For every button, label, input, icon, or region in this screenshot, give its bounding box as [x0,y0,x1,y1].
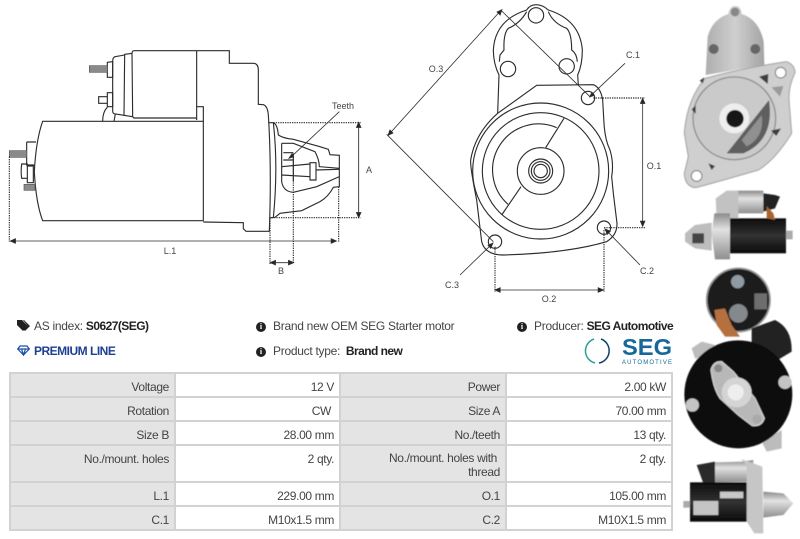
label: C.1: C.1 [626,50,640,60]
mounting holes [581,91,595,105]
specification table: Size B [136,428,169,442]
info: product type: i [260,347,262,356]
photo: rear view [684,268,792,452]
photo: opposite side view [683,459,793,533]
motor body [34,121,203,221]
concentric circles and hub [473,103,609,239]
dimension lines [9,123,361,264]
specification table [9,372,673,531]
info: producer: Producer: SEG Automotive [534,319,673,333]
info: OEM description: i [260,322,262,331]
specification table: 229.00 mm [277,489,334,503]
specification table: No./mount. holes with [389,451,497,465]
drive housing [197,51,270,231]
specification table: Rotation [127,404,169,418]
front view technical drawing [386,4,661,304]
label: O.2: O.2 [542,294,556,304]
specification table: No./mount. holes [84,452,169,466]
info: AS index: AS index: S0627(SEG) [34,319,148,333]
specification table: M10X1.5 mm [598,513,666,527]
specification table: 28.00 mm [283,428,334,442]
specification table: 2.00 kW [624,380,666,394]
photo: front view [684,6,795,188]
info: producer: i [521,322,523,331]
info: product type: Product type: Brand new [273,344,402,358]
specification table: 70.00 mm [615,404,666,418]
side view technical drawing [8,50,372,276]
label: C.3: C.3 [445,280,459,290]
specification table: 12 V [311,380,334,394]
dimension lines [495,98,645,292]
specification table: C.2 [482,513,500,527]
SEG Automotive logo: SEG [622,334,672,360]
photo: side view [685,191,793,259]
SEG Automotive logo: AUTOMOTIVE [622,360,672,366]
icon: tag [17,320,30,331]
specification table: M10x1.5 mm [268,513,334,527]
specification table: 2 qty. [308,452,334,466]
label: Teeth: Teeth [332,101,354,111]
specification table: 2 qty. [640,452,666,466]
specification table: O.1 [482,489,500,503]
mounting flange [471,85,617,255]
specification table: 13 qty. [633,428,666,442]
icon: diamond [17,345,30,356]
label: A: A [366,165,372,175]
solenoid terminals [99,62,113,107]
product photos [682,6,796,534]
specification table: L.1 [153,489,169,503]
specification table: Power [468,380,500,394]
label: B: B [278,266,284,276]
specification table: C.1 [151,513,169,527]
label: O.3: O.3 [429,64,443,74]
specification table: Voltage [131,380,169,394]
specification table: Size A [468,404,500,418]
premium line badge: PREMIUM LINE [34,344,115,358]
rear terminals [21,142,36,183]
drive nose [268,123,339,218]
specification table: CW [312,404,331,418]
solenoid [103,51,197,121]
specification table: No./teeth [454,428,500,442]
label: C.2: C.2 [640,266,654,276]
SEG Automotive logo [584,334,672,366]
solenoid outline [493,5,582,113]
specification table: 105.00 mm [609,489,666,503]
label: L.1: L.1 [164,246,176,256]
specification table: thread [468,465,500,479]
info: OEM description: Brand new OEM SEG Starter motor [273,319,454,333]
label: O.1: O.1 [647,161,661,171]
